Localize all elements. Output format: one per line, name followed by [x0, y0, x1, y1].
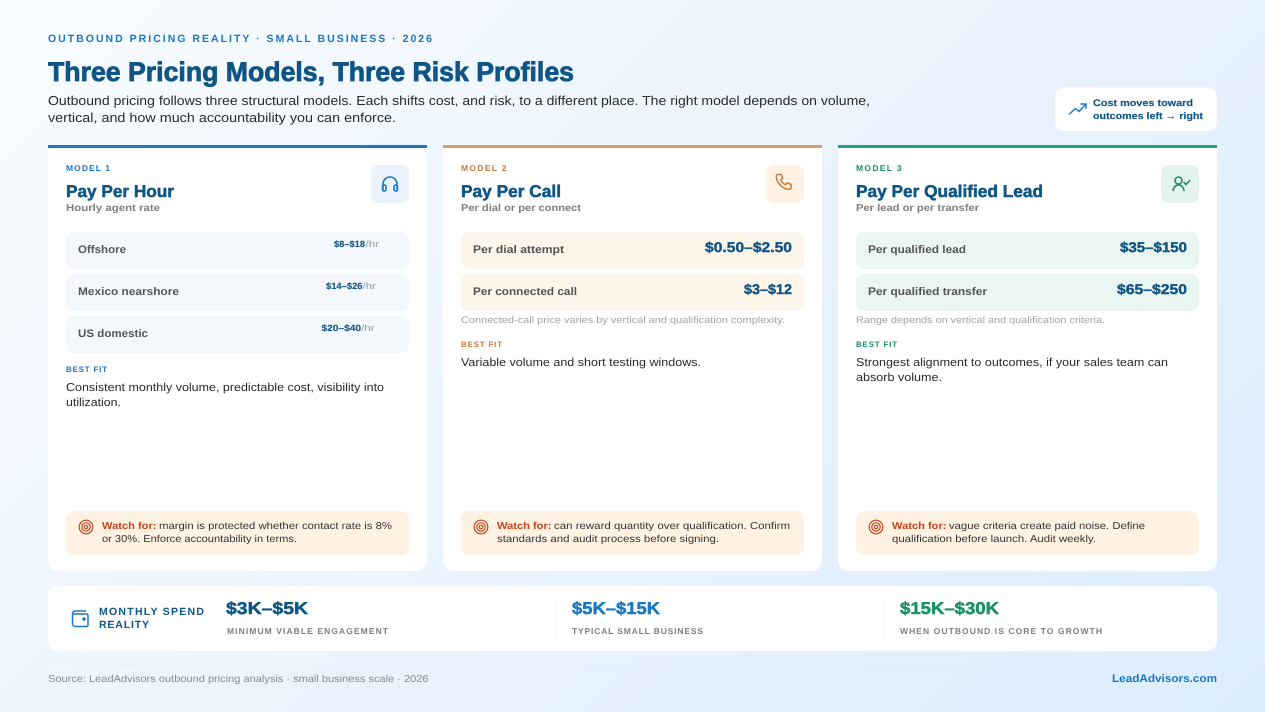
price row: per connected call: $3–$12	[744, 281, 792, 297]
spend tier: minimum viable	[226, 599, 389, 636]
callout: watch for: qualification before launch. Audit weekly.	[892, 534, 1096, 545]
price row: per qualified lead: Per qualified lead	[868, 244, 966, 256]
price row: per qualified transfer	[856, 274, 1199, 311]
icon: target	[79, 520, 93, 534]
best fit text: Variable volume and short testing windows.	[461, 357, 701, 369]
spend tier: core to growth	[900, 599, 1102, 636]
rate row: mexico nearshore: Mexico nearshore	[78, 286, 179, 298]
callout: watch for: can reward quantity over qualification. Confirm	[554, 521, 790, 532]
subtitle: Outbound pricing follows three structural models. Each shifts cost, and risk, to a different place. The right model depends on volume,	[48, 93, 870, 108]
model 1 subheading: Hourly agent rate	[66, 203, 160, 214]
price row: per dial attempt	[461, 232, 804, 269]
model 3 heading: Pay Per Qualified Lead	[856, 182, 1043, 201]
price row: per qualified lead	[856, 232, 1199, 269]
subtitle	[48, 93, 870, 125]
rate row: mexico nearshore	[66, 274, 409, 311]
spend tier: typical small business: $5K–$15K	[572, 599, 661, 618]
icon: target	[474, 520, 488, 534]
rate row: us domestic: US domestic	[78, 328, 148, 340]
icon: headset	[371, 165, 409, 203]
callout: watch for: or 30%. Enforce accountability in terms.	[102, 534, 297, 545]
best fit label: BEST FIT	[66, 365, 107, 374]
panel: model 2 pay per call	[443, 145, 822, 571]
spend tier: minimum viable: MINIMUM VIABLE ENGAGEMENT	[227, 626, 389, 636]
panel: model 1 pay per hour	[48, 145, 427, 571]
price row: per connected call: Per connected call	[473, 286, 577, 298]
pricing note: Connected-call price varies by vertical and qualification complexity.	[461, 315, 785, 326]
rate row: offshore: $8–$18	[334, 239, 365, 249]
panel: model 3 pay per qualified lead	[838, 145, 1217, 571]
icon: trending up arrow	[1070, 104, 1086, 114]
model 2 label: MODEL 2	[461, 163, 507, 173]
spend tier: typical small business: TYPICAL SMALL BUSINESS	[572, 626, 703, 636]
spend tier: core to growth: WHEN OUTBOUND IS CORE TO GROWTH	[900, 626, 1102, 636]
best fit label: BEST FIT	[856, 340, 897, 349]
spend tier: minimum viable: $3K–$5K	[226, 599, 309, 618]
callout text	[1093, 98, 1204, 122]
price row: per connected call	[461, 274, 804, 311]
model 2 subheading: Per dial or per connect	[461, 203, 582, 214]
model 3 subheading: Per lead or per transfer	[856, 203, 979, 214]
callout: watch for	[66, 511, 409, 555]
rate row: us domestic: $20–$40	[322, 323, 361, 333]
panel: monthly spend reality	[48, 586, 1217, 651]
model 1 label: MODEL 1	[66, 163, 110, 173]
model 3 label: MODEL 3	[856, 163, 902, 173]
brand link: LeadAdvisors.com	[1112, 673, 1217, 685]
callout: watch for: Watch for:	[102, 521, 156, 532]
icon: phone	[766, 165, 804, 203]
icon: person with check	[1161, 165, 1199, 203]
price row: per dial attempt: $0.50–$2.50	[705, 239, 792, 255]
best fit text	[66, 382, 384, 409]
rate row: mexico nearshore: $14–$26	[326, 281, 362, 291]
price row: per qualified transfer: $65–$250	[1117, 281, 1187, 297]
rate row: us domestic	[66, 316, 409, 353]
price row: per qualified transfer: Per qualified transfer	[868, 286, 988, 298]
eyebrow: OUTBOUND PRICING REALITY · SMALL BUSINESS · 2026	[48, 33, 432, 45]
callout text: Cost moves toward	[1093, 98, 1193, 109]
icon: wallet	[72, 611, 88, 626]
callout: watch for: vague criteria create paid noise. Define	[949, 521, 1145, 532]
best fit label: BEST FIT	[461, 340, 502, 349]
callout: watch for: Watch for:	[892, 521, 946, 532]
model 2 heading: Pay Per Call	[461, 182, 561, 201]
rate row: offshore: Offshore	[78, 244, 126, 256]
spend tier: typical small business	[572, 599, 703, 636]
callout: watch for	[461, 511, 804, 555]
price row: per qualified lead: $35–$150	[1120, 239, 1187, 255]
best fit text	[856, 357, 1168, 384]
callout: watch for: margin is protected whether contact rate is 8%	[159, 521, 392, 532]
rate row: mexico nearshore: /hr	[362, 281, 376, 291]
best fit text: Consistent monthly volume, predictable cost, visibility into	[66, 382, 384, 394]
rate row: offshore	[66, 232, 409, 269]
pricing note: Range depends on vertical and qualification criteria.	[856, 315, 1105, 326]
callout: watch for: standards and audit process before signing.	[497, 534, 719, 545]
rate row: offshore: /hr	[366, 239, 379, 249]
subtitle: vertical, and how much accountability you can enforce.	[48, 110, 396, 125]
best fit text: utilization.	[66, 397, 121, 409]
best fit text: absorb volume.	[856, 372, 942, 384]
spend heading: REALITY	[99, 619, 149, 631]
spend heading: MONTHLY SPEND	[99, 606, 204, 618]
spend tier: core to growth: $15K–$30K	[900, 599, 1000, 618]
best fit text: Strongest alignment to outcomes, if your sales team can	[856, 357, 1168, 369]
callout text: outcomes left → right	[1093, 111, 1204, 122]
source note: Source: LeadAdvisors outbound pricing analysis · small business scale · 2026	[48, 674, 429, 685]
price row: per dial attempt: Per dial attempt	[473, 244, 564, 256]
model 1 heading: Pay Per Hour	[66, 182, 174, 201]
spend heading	[99, 606, 204, 631]
callout: cost moves toward outcomes	[1055, 88, 1217, 131]
title: Three Pricing Models, Three Risk Profiles	[48, 57, 574, 87]
icon: target	[869, 520, 883, 534]
rate row: us domestic: /hr	[361, 323, 374, 333]
callout: watch for: Watch for:	[497, 521, 552, 532]
callout: watch for	[856, 511, 1199, 555]
